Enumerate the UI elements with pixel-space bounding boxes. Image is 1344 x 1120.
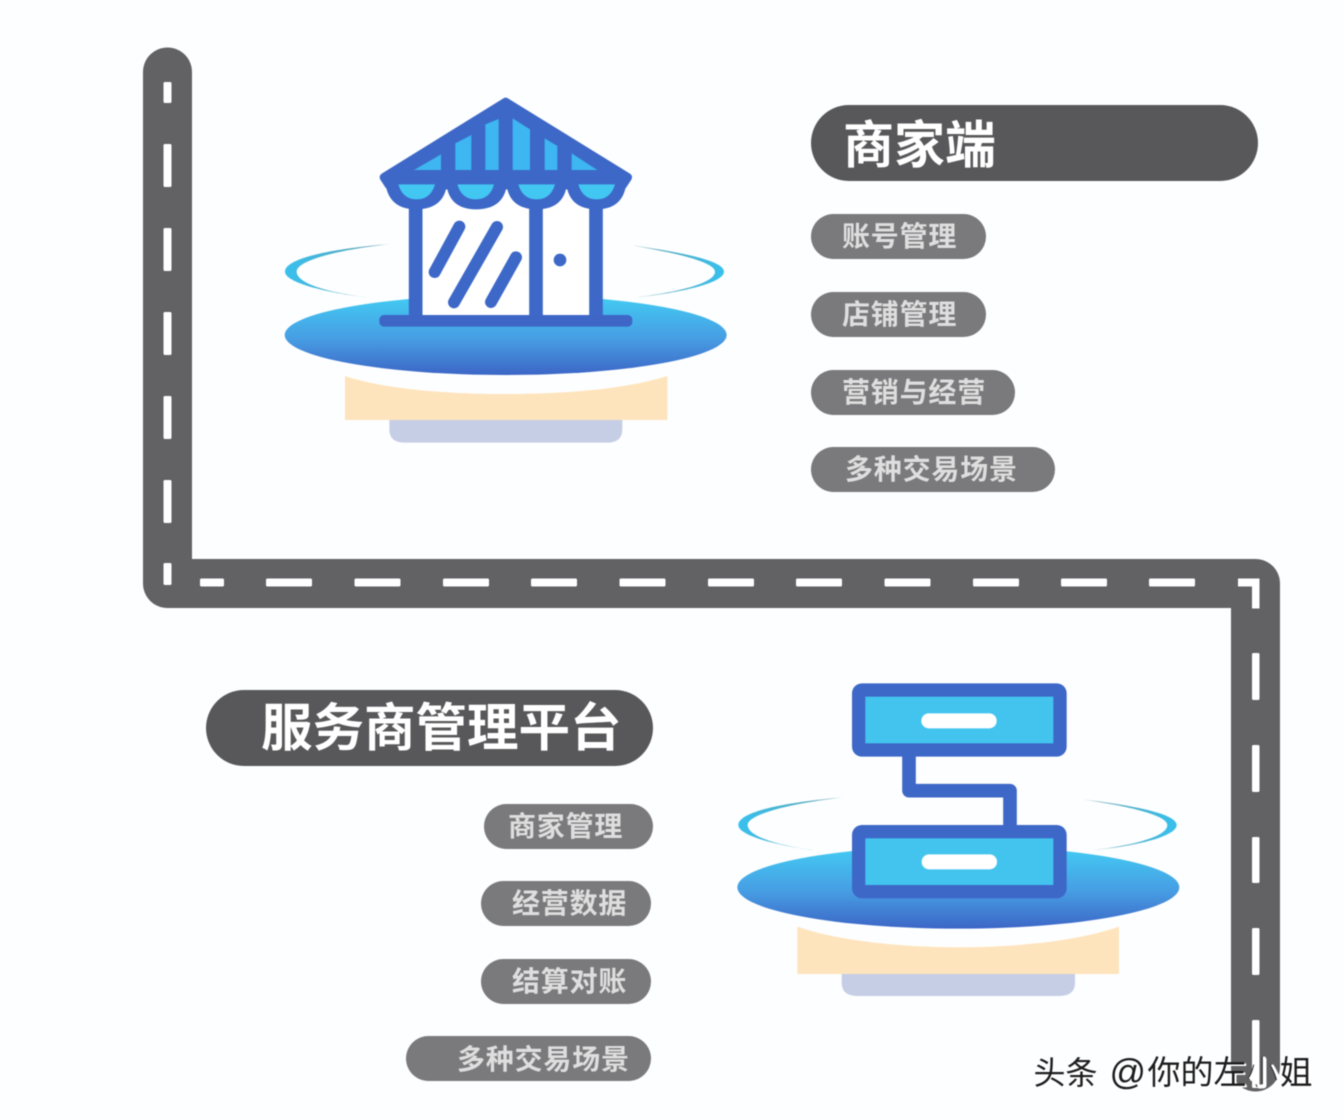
heading pill: 商家端 — [811, 105, 1258, 181]
tag: 结算对账: 结算对账 — [512, 966, 627, 997]
lavender base — [389, 419, 622, 443]
orbit ring — [285, 244, 724, 298]
upper box — [852, 683, 1067, 757]
shop walls — [379, 200, 632, 327]
tag: 店铺管理 — [811, 292, 986, 337]
icon: storefront on platform — [285, 102, 727, 443]
tag: 多种交易场景: 多种交易场景 — [845, 454, 1018, 485]
road — [164, 72, 1260, 1088]
lavender base — [842, 973, 1075, 996]
blue disc — [285, 295, 727, 375]
source watermark: @ — [1110, 1051, 1146, 1092]
source watermark: 你的左小姐 — [1148, 1054, 1314, 1091]
blue disc — [737, 846, 1179, 929]
tag: 店铺管理: 店铺管理 — [842, 299, 957, 330]
tag: 商家管理 — [484, 804, 653, 849]
tag: 多种交易场景 — [811, 447, 1055, 492]
source watermark: @ — [1110, 1051, 1147, 1092]
source watermark: 你的左小姐 — [1148, 1054, 1312, 1091]
tag: 结算对账 — [481, 959, 651, 1004]
tag: 账号管理: 账号管理 — [842, 221, 957, 252]
source watermark: 头条 — [1034, 1055, 1098, 1091]
tag: 多种交易场景 — [406, 1036, 651, 1081]
source watermark: 头条 — [1036, 1056, 1100, 1092]
door knob — [554, 254, 566, 266]
lower box — [852, 825, 1067, 898]
tag: 多种交易场景: 多种交易场景 — [457, 1044, 630, 1075]
window reflections — [435, 227, 516, 302]
tag: 账号管理 — [811, 214, 986, 259]
heading pill: 服务商管理平台 — [206, 690, 653, 766]
cream base — [345, 376, 667, 420]
heading pill: 服务商管理平台: 服务商管理平台 — [261, 699, 622, 757]
tag: 商家管理: 商家管理 — [508, 811, 623, 842]
connector — [909, 753, 1010, 828]
cream base — [797, 927, 1119, 974]
source watermark: 你的左小姐 — [1150, 1056, 1314, 1092]
source watermark — [1034, 1055, 1312, 1090]
tag: 营销与经营: 营销与经营 — [842, 377, 986, 408]
roof — [384, 102, 628, 209]
tag: 营销与经营 — [811, 370, 1015, 415]
orbit ring — [738, 797, 1177, 852]
source watermark: @ — [1112, 1052, 1148, 1094]
tag: 经营数据 — [481, 881, 651, 926]
tag: 经营数据: 经营数据 — [512, 888, 627, 919]
icon: flow diagram on platform — [737, 683, 1179, 996]
heading pill: 商家端: 商家端 — [843, 117, 996, 174]
source watermark: 头条 — [1034, 1055, 1099, 1091]
